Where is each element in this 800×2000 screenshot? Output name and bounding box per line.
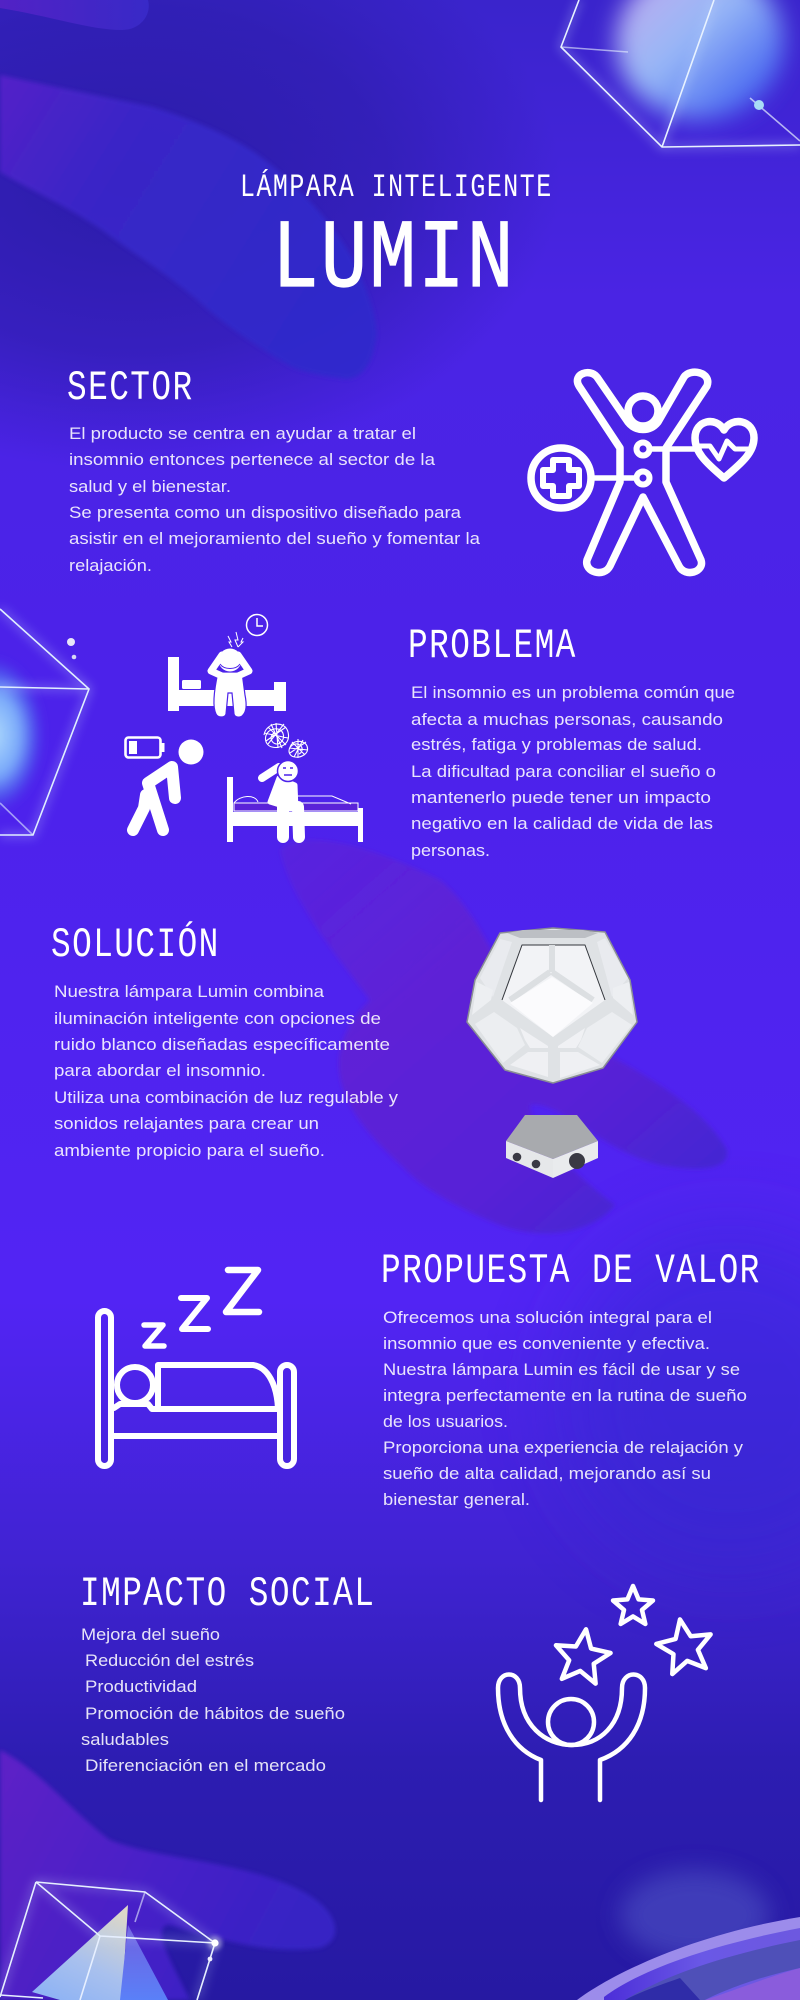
text block: solucion: sonidos relajantes para crear un — [54, 1114, 319, 1133]
heading: impacto social: IMPACTO SOCIAL — [80, 1572, 375, 1618]
icon: sleeping in bed — [98, 1270, 294, 1466]
panel: problema — [126, 614, 735, 860]
heading: solucion: SOLUCIÓN — [51, 920, 220, 969]
text block: problema: mantenerlo puede tener un impacto — [411, 788, 711, 807]
icon: stressed person on bed — [227, 723, 363, 842]
text block: solucion: Nuestra lámpara Lumin combina — [54, 982, 325, 1001]
text block: problema: afecta a muchas personas, causando — [411, 710, 723, 729]
text block: problema: La dificultad para conciliar el sueño o — [411, 762, 716, 781]
text block: solucion: para abordar el insomnio. — [54, 1061, 266, 1080]
text block: solucion: ruido blanco diseñadas específicamente — [54, 1035, 390, 1054]
text block: propuesta de valor: integra perfectamente en la rutina de sueño — [383, 1386, 747, 1405]
text block: sector: asistir en el mejoramiento del sueño y fomentar la — [69, 529, 481, 548]
text block: problema: El insomnio es un problema común que — [411, 683, 735, 702]
icon: dodecahedron lamp — [467, 928, 637, 1083]
text block: sector — [69, 424, 481, 575]
text block: impacto social: Productividad — [85, 1677, 197, 1696]
decoration: top right cube — [561, 0, 800, 147]
icon: health figure — [531, 372, 754, 573]
text block: propuesta de valor: bienestar general. — [383, 1490, 530, 1509]
panel: impacto social — [80, 1572, 716, 1800]
text block: impacto social: Mejora del sueño — [81, 1625, 220, 1644]
panel: sector — [67, 366, 754, 575]
heading: problema: PROBLEMA — [408, 624, 577, 670]
text block: solucion — [54, 982, 399, 1160]
decoration: left cube — [0, 609, 89, 835]
text block: propuesta de valor: Nuestra lámpara Lumin es fácil de usar y se — [383, 1360, 740, 1379]
text block: sector: salud y el bienestar. — [69, 477, 231, 496]
icon: celebrating person with stars — [498, 1586, 716, 1800]
text block: sector: relajación. — [69, 556, 152, 575]
text block: impacto social: Diferenciación en el mercado — [85, 1756, 326, 1775]
text block: problema: personas. — [411, 841, 490, 860]
text block: propuesta de valor — [383, 1308, 747, 1509]
decoration: bottom right ring — [577, 1870, 800, 2000]
text block: sector: Se presenta como un dispositivo diseñado para — [69, 503, 462, 522]
text block: impacto social: Promoción de hábitos de sueño — [85, 1704, 345, 1723]
text block: solucion: iluminación inteligente con opciones de — [54, 1009, 381, 1028]
subtitle: LÁMPARA INTELIGENTE — [240, 168, 553, 206]
text block: impacto social: Reducción del estrés — [85, 1651, 254, 1670]
text block: sector: El producto se centra en ayudar a tratar el — [69, 424, 416, 443]
text block: problema: estrés, fatiga y problemas de salud. — [411, 735, 702, 754]
text block: solucion: Utiliza una combinación de luz regulable y — [54, 1088, 399, 1107]
icon: insomnia person on bed — [168, 614, 286, 717]
text block: propuesta de valor: sueño de alta calidad, mejorando así su — [383, 1464, 711, 1483]
heading: propuesta de valor: PROPUESTA DE VALOR — [381, 1249, 761, 1295]
title — [240, 168, 553, 316]
heading: sector: SECTOR — [67, 366, 194, 412]
panel: solucion — [51, 920, 637, 1178]
text block: sector: insomnio entonces pertenece al sector de la — [69, 450, 436, 469]
text block: propuesta de valor: insomnio que es conveniente y efectiva. — [383, 1334, 710, 1353]
text block: propuesta de valor: Proporciona una experiencia de relajación y — [383, 1438, 744, 1457]
panel: propuesta de valor — [98, 1249, 761, 1509]
text block: problema — [411, 683, 735, 860]
icon: tired person with low battery — [126, 738, 204, 830]
decoration: bottom left cube — [0, 1882, 222, 2000]
text block: solucion: ambiente propicio para el sueño. — [54, 1141, 325, 1160]
text block: impacto social: saludables — [81, 1730, 169, 1749]
text block: propuesta de valor: de los usuarios. — [383, 1412, 508, 1431]
text block: propuesta de valor: Ofrecemos una solución integral para el — [383, 1308, 712, 1327]
text block: problema: negativo en la calidad de vida de las — [411, 814, 713, 833]
icon: lamp base — [506, 1115, 598, 1178]
product name: LUMIN — [272, 206, 516, 316]
text block: impacto social — [81, 1625, 345, 1775]
